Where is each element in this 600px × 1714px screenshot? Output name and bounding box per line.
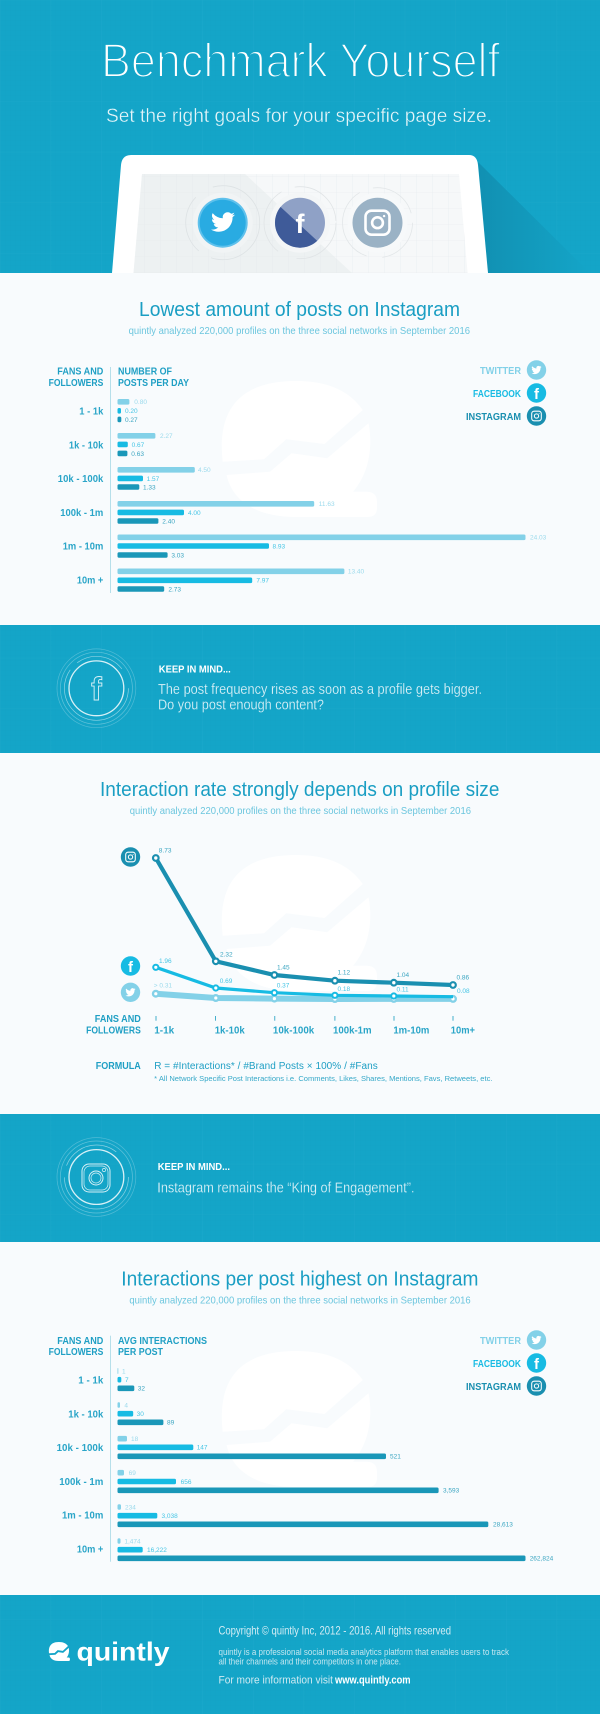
footer text: For more information visit (218, 1674, 333, 1686)
callout text (158, 663, 482, 713)
bar chart: 30 (137, 1411, 144, 1418)
quintly logo: quintly (76, 1637, 170, 1667)
bar chart: 28,613 (493, 1522, 513, 1529)
bar chart: 32 (138, 1386, 145, 1393)
panel: keep in mind facebook (0, 625, 600, 753)
row labels (58, 406, 103, 586)
row labels: 10k - 100k (57, 1442, 103, 1454)
bar chart: 656 (181, 1479, 192, 1486)
bar chart: 262,824 (530, 1556, 554, 1563)
row labels: 1 - 1k (79, 406, 103, 418)
value labels: 1.96 (159, 958, 172, 965)
footer text: Copyright © quintly Inc, 2012 - 2016. All rights reserved (218, 1624, 451, 1638)
icon: facebook (264, 187, 336, 259)
icon: facebook outline: f (91, 671, 102, 707)
footer text: quintly is a professional social media analytics platform that enables users to track (218, 1647, 509, 1658)
x axis: 1-1k (154, 1025, 174, 1037)
bar chart: 3,593 (443, 1488, 460, 1495)
series icons: f (128, 959, 134, 976)
bar chart: 1,474 (124, 1538, 141, 1545)
bar chart: 4 (124, 1402, 128, 1409)
axis headers: FOLLOWERS (49, 1347, 104, 1358)
axis headers: AVG INTERACTIONS (118, 1336, 207, 1347)
hero title: Benchmark Yourself (101, 35, 501, 88)
x axis: 1k-10k (215, 1025, 245, 1037)
row labels: 100k - 1m (60, 507, 103, 519)
bar chart: 1.57 (147, 476, 160, 483)
bar chart: 24.03 (530, 535, 547, 542)
bar chart: 8.93 (272, 543, 286, 550)
hero panel (0, 0, 600, 273)
bar chart: 2.27 (160, 433, 173, 440)
x axis: 10k-100k (273, 1025, 314, 1037)
legend (466, 360, 546, 426)
callout text (157, 1161, 415, 1197)
callout text: Do you post enough content? (158, 696, 324, 713)
x axis: 10m+ (451, 1025, 475, 1037)
bar chart: 521 (390, 1454, 401, 1461)
legend: INSTAGRAM (466, 1382, 521, 1393)
x axis: FOLLOWERS (86, 1025, 141, 1036)
bar chart: 89 (167, 1420, 175, 1427)
row labels: 10m + (77, 574, 103, 586)
subheading: quintly analyzed 220,000 profiles on the three social networks in September 2016 (129, 325, 470, 337)
bar chart: 1.33 (143, 484, 156, 491)
value labels (154, 847, 470, 995)
callout text: KEEP IN MIND... (158, 1161, 230, 1173)
bar chart: 16,222 (147, 1547, 167, 1554)
value labels: 0.86 (456, 975, 470, 982)
x axis (86, 1014, 475, 1037)
line chart (121, 847, 470, 1002)
panel: keep in mind instagram (0, 1114, 600, 1242)
value labels: 1.04 (396, 972, 410, 979)
callout text: KEEP IN MIND... (159, 663, 231, 675)
bar chart: 0.20 (125, 408, 138, 415)
value labels: 0.08 (457, 988, 470, 995)
axis headers: FANS AND (57, 367, 103, 378)
axis headers (49, 367, 189, 593)
legend (466, 1330, 546, 1396)
legend: f (534, 386, 540, 403)
subheading: quintly analyzed 220,000 profiles on the three social networks in September 2016 (130, 805, 471, 817)
callout text: The post frequency rises as soon as a profile gets bigger. (158, 681, 482, 698)
bar chart: 1 (122, 1368, 126, 1375)
hero subtitle: Set the right goals for your specific page size. (106, 105, 492, 127)
bar chart: 18 (131, 1436, 139, 1443)
axis headers: FOLLOWERS (49, 378, 104, 389)
formula: R = #Interactions* / #Brand Posts × 100% / #Fans (154, 1061, 378, 1072)
formula: FORMULA (96, 1061, 141, 1072)
bar chart: 234 (125, 1504, 136, 1511)
x axis: 100k-1m (333, 1025, 372, 1037)
watermark logo (222, 855, 377, 991)
value labels: 0.18 (338, 986, 351, 993)
bar chart: 69 (129, 1470, 136, 1477)
panel: interaction rate (86, 778, 499, 1083)
row labels: 1k - 10k (68, 1408, 103, 1420)
value labels: 1.45 (277, 964, 290, 971)
row labels: 1m - 10m (62, 1510, 103, 1522)
x axis: FANS AND (95, 1014, 141, 1025)
bar chart: 7.97 (256, 578, 269, 585)
bar chart: 0.67 (132, 442, 145, 449)
axis headers: NUMBER OF (118, 367, 172, 378)
axis headers (49, 1336, 207, 1562)
value labels: 2.32 (220, 951, 233, 958)
panel: interactions per post (49, 1267, 554, 1563)
bar chart (118, 1368, 554, 1563)
bar chart: 2.40 (162, 518, 175, 525)
bar chart: 11.63 (319, 501, 335, 508)
legend: f (534, 1356, 540, 1373)
row labels: 10k - 100k (58, 473, 103, 485)
row labels: 1m - 10m (63, 541, 103, 553)
row labels (57, 1374, 103, 1555)
heading: Interaction rate strongly depends on profile size (100, 778, 499, 801)
legend: FACEBOOK (473, 389, 522, 400)
footer (0, 1595, 600, 1714)
bar chart: 147 (197, 1445, 208, 1452)
footer text: all their channels and their competitors in one place. (218, 1657, 401, 1668)
bar chart: 13.40 (348, 569, 365, 576)
axis headers: POSTS PER DAY (118, 378, 189, 389)
formula: * All Network Specific Post Interactions i.e. Comments, Likes, Shares, Mentions, Favs, Retweets, etc. (154, 1074, 492, 1083)
bar chart: 3,038 (162, 1513, 178, 1520)
bar chart: 2.73 (168, 586, 181, 593)
formula (96, 1061, 492, 1083)
value labels: > 0.31 (154, 982, 172, 989)
instagram series (153, 855, 456, 988)
icon: twitter (186, 186, 260, 260)
callout text: Instagram remains the “King of Engagement”. (157, 1180, 415, 1197)
footer text: www.quintly.com (334, 1674, 411, 1686)
series icons (121, 847, 140, 1002)
bar chart: 4.00 (188, 510, 201, 517)
bar chart: 4.50 (198, 467, 211, 474)
value labels: 0.69 (220, 978, 233, 985)
bar chart: 7 (125, 1377, 129, 1384)
bar chart: 3.03 (171, 552, 184, 559)
subheading: quintly analyzed 220,000 profiles on the three social networks in September 2016 (129, 1294, 471, 1306)
legend: TWITTER (480, 1336, 522, 1347)
row labels: 100k - 1m (59, 1476, 103, 1488)
heading: Lowest amount of posts on Instagram (139, 298, 460, 321)
watermark logo (222, 1351, 377, 1487)
legend: FACEBOOK (473, 1359, 522, 1370)
laptop (112, 155, 488, 273)
row labels: 10m + (77, 1543, 103, 1555)
bar chart: 0.27 (125, 417, 138, 424)
footer text (218, 1624, 509, 1686)
icon: facebook outline (57, 649, 136, 728)
legend: INSTAGRAM (466, 412, 521, 423)
twitter series (153, 991, 456, 1002)
laptop long shadow (478, 162, 590, 273)
legend: TWITTER (480, 366, 522, 377)
axis headers: FANS AND (57, 1336, 103, 1347)
panel: posts per day (49, 298, 547, 593)
heading: Interactions per post highest on Instagram (121, 1267, 478, 1290)
value labels: 0.11 (396, 986, 409, 993)
bar chart: 0.80 (134, 399, 147, 406)
icon: instagram outline (57, 1138, 136, 1216)
value labels: 8.73 (159, 847, 172, 854)
row labels: 1 - 1k (78, 1374, 103, 1386)
axis headers: PER POST (118, 1347, 163, 1358)
bar chart (118, 399, 547, 593)
icon: facebook: f (296, 209, 306, 239)
x axis: 1m-10m (393, 1025, 429, 1037)
row labels: 1k - 10k (69, 439, 103, 451)
value labels: 0.37 (277, 983, 290, 990)
watermark logo (222, 381, 377, 517)
facebook series (153, 965, 453, 999)
icon: instagram (342, 188, 412, 258)
value labels: 1.12 (338, 969, 351, 976)
bar chart: 0.63 (131, 451, 144, 458)
